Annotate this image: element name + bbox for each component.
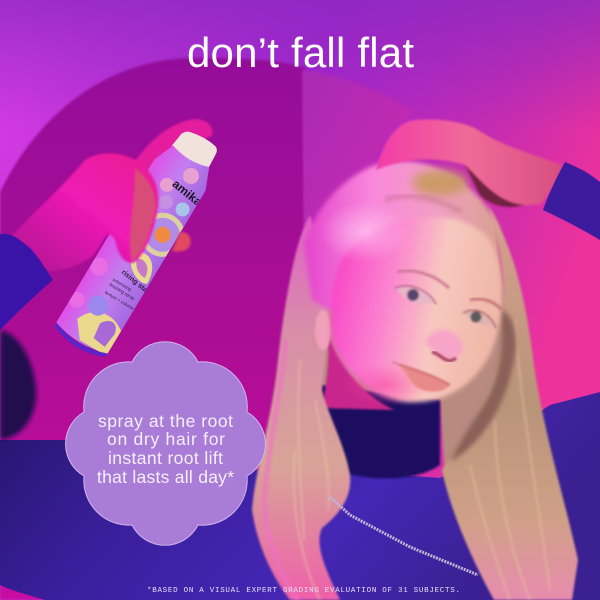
- raised right hand: [376, 119, 562, 205]
- eyebrow left: [397, 271, 449, 288]
- product descriptor: volumizing: [112, 277, 133, 292]
- flower callout: [66, 342, 265, 545]
- left hand holding bottle: [8, 153, 158, 272]
- shadow under left arm: [0, 330, 36, 440]
- bottle cap: [169, 126, 221, 172]
- callout text: that lasts all day*: [97, 467, 234, 487]
- bottle base: [51, 323, 108, 362]
- thumb behind bottle: [172, 232, 191, 251]
- hair: root highlight: [412, 170, 468, 196]
- face: [320, 202, 502, 407]
- bottle body: [54, 146, 210, 357]
- sweater body: [0, 392, 600, 600]
- flower shape: [66, 342, 265, 545]
- ear: [315, 310, 331, 350]
- callout text: instant root lift: [108, 448, 223, 468]
- hand shadow on hair: [465, 165, 525, 207]
- nose: [425, 330, 463, 361]
- callout text: [97, 411, 234, 487]
- spray bottle: [54, 132, 217, 357]
- product descriptor: finishing spray: [108, 282, 136, 301]
- right sleeve: [543, 162, 600, 240]
- product name: rising star: [120, 269, 151, 296]
- left sleeve: [0, 234, 53, 330]
- hair: right lengths: [442, 205, 578, 600]
- chin shading: [340, 363, 430, 407]
- arch recess: [0, 58, 305, 600]
- neck shadow: [322, 335, 395, 410]
- callout text: on dry hair for: [107, 429, 225, 449]
- hair: parting shadow: [385, 196, 462, 212]
- hair: left lengths: [252, 215, 350, 600]
- title: don’t fall flat: [187, 29, 414, 76]
- inner wall panel: [302, 70, 415, 260]
- finger detail: [130, 168, 156, 262]
- shadow beside face: [450, 310, 516, 462]
- hair: behind the head: [312, 215, 512, 478]
- product descriptor: [104, 278, 135, 310]
- brand name: amika: [170, 177, 205, 209]
- eye left: [395, 286, 436, 304]
- back fingers of hand: [132, 119, 212, 175]
- eyebrow right: [470, 299, 502, 310]
- zipper: [330, 497, 478, 575]
- product descriptor: texture + volume: [104, 290, 135, 311]
- smile: [398, 364, 450, 392]
- turtleneck collar: [320, 385, 440, 478]
- crown glow: [320, 202, 410, 262]
- callout text: spray at the root: [98, 411, 233, 431]
- footnote: *BASED ON A VISUAL EXPERT GRADING EVALUATION OF 31 SUBJECTS.: [147, 587, 460, 595]
- hair: crown: [304, 161, 500, 310]
- eye right: [463, 310, 496, 328]
